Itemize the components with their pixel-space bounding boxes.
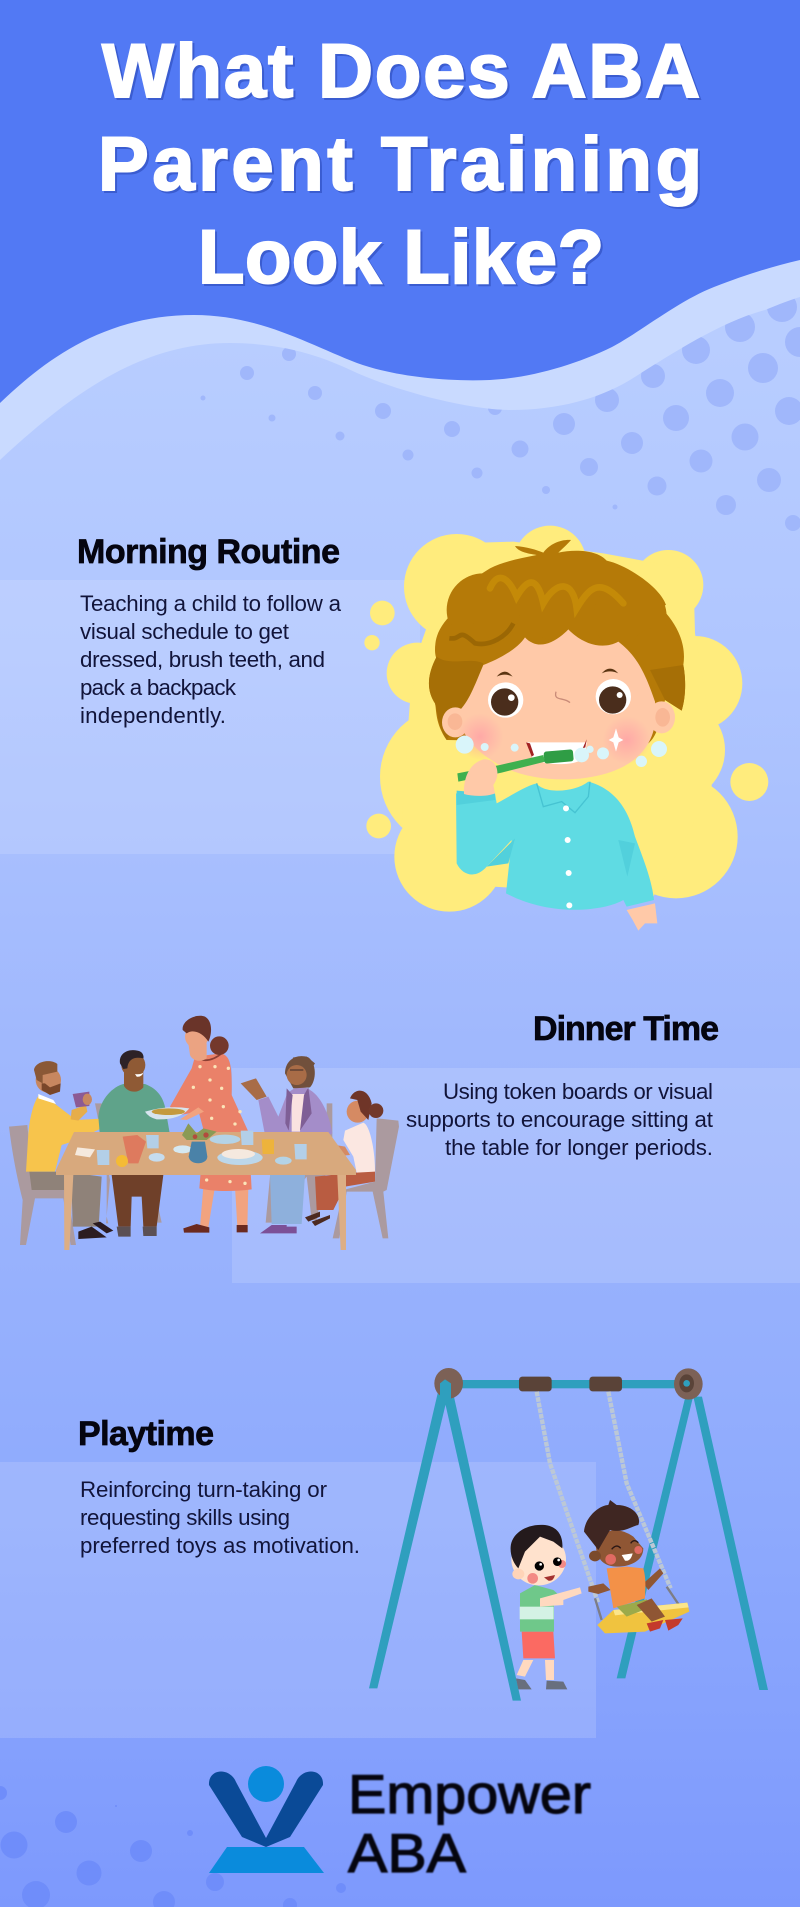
boy standing	[511, 1525, 582, 1689]
text block: dinner time: Using token boards or visual	[443, 1079, 713, 1104]
right chair	[333, 1118, 399, 1238]
foam bubbles	[456, 736, 667, 767]
frame	[369, 1380, 768, 1701]
man with beard	[26, 1061, 128, 1239]
end caps and hangers	[434, 1368, 703, 1400]
text block: dinner time	[406, 1079, 714, 1160]
sparkle	[609, 728, 623, 752]
table settings	[75, 1123, 307, 1167]
text block: dinner time: the table for longer periods.	[445, 1135, 713, 1160]
hair detail	[490, 578, 623, 608]
title: Parent Training	[98, 122, 702, 207]
boy on swing	[584, 1500, 683, 1632]
logo wordmark	[348, 1763, 591, 1884]
illustration: family dinner	[9, 1016, 399, 1250]
panel: dinner time backdrop	[232, 1068, 800, 1283]
logo wordmark: Empower	[348, 1763, 591, 1825]
table	[56, 1132, 356, 1175]
title: Look Like?	[198, 215, 604, 300]
logo mark	[209, 1766, 324, 1873]
title	[98, 29, 702, 300]
text block: morning routine: dressed, brush teeth, and	[80, 647, 325, 672]
text block: playtime: Reinforcing turn-taking or	[80, 1477, 328, 1502]
illustration: boy brushing teeth	[364, 526, 768, 931]
yellow cloud	[364, 526, 768, 912]
text block: dinner time: supports to encourage sitting at	[406, 1107, 714, 1132]
woman with glasses	[241, 1056, 332, 1233]
panel: morning routine backdrop	[0, 580, 420, 854]
man in green sweater	[98, 1050, 170, 1237]
title: What Does ABA	[102, 29, 700, 114]
logo wordmark: ABA	[348, 1822, 466, 1884]
heading: playtime: Playtime	[78, 1415, 214, 1453]
illustration: swing set	[369, 1368, 768, 1701]
text block: morning routine: independently.	[80, 703, 226, 728]
girl	[305, 1091, 383, 1226]
heading: dinner time: Dinner Time	[533, 1010, 719, 1048]
text block: morning routine: Teaching a child to follow a	[80, 591, 342, 616]
cheeks	[457, 713, 503, 760]
toothbrush	[457, 749, 574, 782]
dot pattern: bottom left	[0, 1786, 346, 1907]
logo: Empower ABA	[209, 1763, 591, 1884]
text block: morning routine: visual schedule to get	[80, 619, 290, 644]
hair	[429, 540, 685, 743]
woman standing serving	[145, 1016, 252, 1233]
seat	[595, 1587, 689, 1633]
hand on brush	[464, 759, 497, 796]
text block: playtime: requesting skills using	[80, 1505, 290, 1530]
text block: morning routine	[80, 591, 342, 728]
mouth	[526, 742, 587, 764]
text block: playtime: preferred toys as motivation.	[80, 1533, 360, 1558]
shirt	[456, 782, 654, 910]
eyes	[488, 682, 523, 718]
face	[460, 629, 656, 779]
heading: morning routine: Morning Routine	[77, 533, 340, 571]
text block: morning routine: pack a backpack	[80, 675, 237, 700]
lower hand	[627, 903, 657, 931]
text block: playtime	[80, 1477, 360, 1558]
left chair	[9, 1125, 76, 1245]
panel: playtime backdrop	[0, 1462, 596, 1738]
chains	[537, 1392, 671, 1603]
back chairs	[95, 1103, 332, 1223]
dot pattern: top right	[200, 292, 800, 531]
